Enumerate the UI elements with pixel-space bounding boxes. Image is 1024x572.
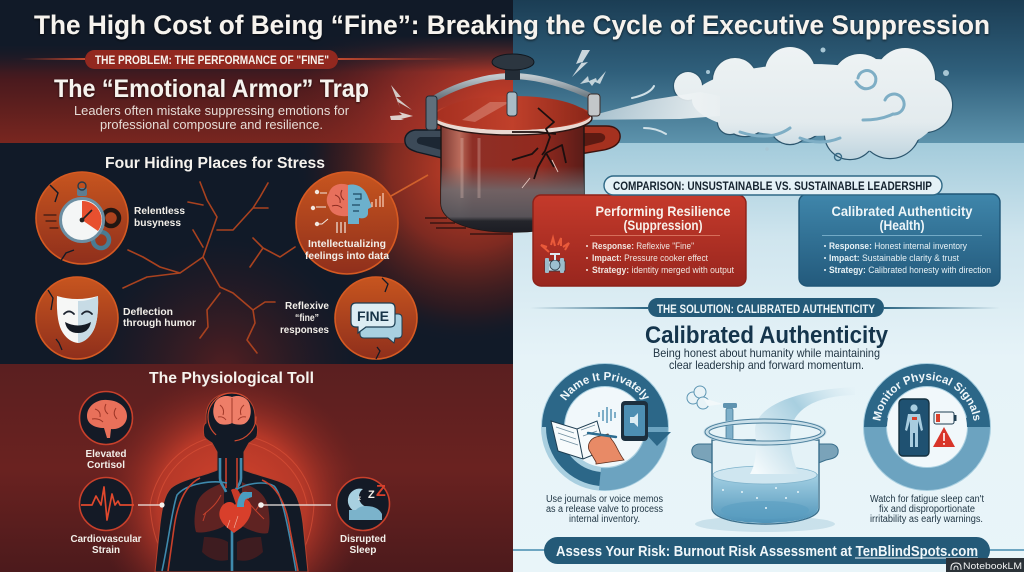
label: intellectualizing feelings into data [305, 239, 389, 262]
card: performing resilience: (Suppression) [624, 217, 702, 233]
step caption: monitor physical signals [870, 494, 984, 525]
icon: leaking valve [541, 238, 569, 273]
icon: stopwatch and gears [44, 182, 119, 248]
icon: moon, bed and zzz: Z [368, 489, 375, 501]
step caption: monitor physical signals: Watch for fatigue sleep can't [870, 494, 984, 505]
card: calibrated authenticity: Calibrated Authenticity [832, 203, 973, 219]
label: reflexive fine responses: Reflexive [285, 301, 329, 312]
item: intellectualizing feelings into data [296, 172, 398, 274]
step: monitor physical signals: Monitor Physical Signals [872, 372, 980, 421]
connector to pressure cooker [391, 175, 428, 196]
icon: pressure sparks [390, 50, 606, 120]
heading: four hiding places: Four Hiding Places for Stress [105, 155, 325, 172]
solution description [653, 346, 880, 372]
label: disrupted sleep [340, 534, 386, 556]
problem description: Leaders often mistake suppressing emotions for [74, 103, 350, 118]
badge: comparison [604, 176, 942, 195]
item: elevated cortisol [80, 392, 132, 471]
step caption: monitor physical signals: fix and disproportionate [879, 504, 975, 515]
card: performing resilience [533, 195, 746, 286]
step caption: name it privately [546, 494, 663, 525]
icon: brain [87, 400, 127, 438]
step caption: name it privately: Use journals or voice memos [546, 494, 663, 505]
solution description: Being honest about humanity while maintaining [653, 346, 880, 360]
item: deflection through humor [36, 277, 196, 359]
step: name it privately: Name It Privately [560, 372, 650, 400]
body silhouette with organs [150, 393, 314, 572]
label: elevated cortisol: Cortisol [87, 460, 125, 471]
comparison bullets: health [824, 241, 991, 275]
card: calibrated authenticity: (Health) [880, 217, 924, 233]
notebooklm watermark [946, 558, 1024, 572]
icon: journal, hand and phone [551, 401, 648, 464]
icon: brain and data head [311, 184, 383, 233]
step: name it privately [541, 363, 671, 525]
label: cardiovascular strain: Cardiovascular [70, 534, 142, 545]
icon: body scan, battery and warning [899, 399, 956, 456]
card: performing resilience: Performing Resilience [596, 203, 731, 219]
steam cloud [575, 47, 952, 160]
label: deflection through humor: Deflection [123, 307, 173, 318]
label: intellectualizing feelings into data: feelings into data [305, 251, 389, 262]
label: relentless busyness: busyness [134, 218, 181, 229]
label: relentless busyness [134, 206, 185, 229]
icon: fine speech bubbles: FINE [357, 309, 389, 324]
label: reflexive fine responses: responses [280, 325, 329, 336]
label: cardiovascular strain: Strain [92, 545, 120, 556]
comparison bullets: suppression: Response: Reflexive "Fine" [592, 241, 694, 251]
step: monitor physical signals [863, 363, 991, 525]
step caption: monitor physical signals: irritability as early warnings. [870, 514, 983, 525]
label: deflection through humor [123, 307, 196, 329]
heading: emotional armor trap: The “Emotional Armor” Trap [54, 75, 369, 103]
panel: the problem [20, 50, 463, 132]
item: disrupted sleep [336, 478, 390, 556]
pot cracks [512, 108, 566, 179]
panel: comparison [533, 176, 1000, 286]
comparison bullets: health: Impact: Sustainable clarity & trust [829, 253, 959, 263]
icon: moon, bed and zzz: z [358, 496, 361, 502]
badge: the solution: THE SOLUTION: CALIBRATED AUTHENTICITY [657, 302, 875, 316]
item: cardiovascular strain [70, 478, 142, 556]
badge: comparison: COMPARISON: UNSUSTAINABLE VS. SUSTAINABLE LEADERSHIP [613, 181, 932, 193]
label: disrupted sleep: Disrupted [340, 534, 386, 545]
item: reflexive fine responses [280, 277, 417, 359]
label: reflexive fine responses: “fine” [295, 313, 319, 324]
panel: the physiological toll [70, 370, 390, 572]
item: relentless busyness [36, 172, 185, 264]
label: cardiovascular strain [70, 534, 142, 556]
icon: calibrated glass pot [687, 386, 855, 532]
label: intellectualizing feelings into data: Intellectualizing [308, 239, 386, 250]
comparison bullets: suppression [586, 241, 734, 275]
badge: the problem: THE PROBLEM: THE PERFORMANCE OF "FINE" [95, 53, 329, 67]
label: elevated cortisol: Elevated [86, 449, 126, 460]
solution description: clear leadership and forward momentum. [669, 358, 864, 372]
connector: sleep [258, 502, 331, 508]
heading: calibrated authenticity: Calibrated Authenticity [645, 322, 889, 349]
comparison bullets: health: Response: Honest internal inventory [829, 241, 967, 251]
badge: the solution [648, 298, 884, 317]
comparison bullets: suppression: Impact: Pressure cooker effect [592, 253, 708, 263]
title: The High Cost of Being “Fine”: Breaking the Cycle of Executive Suppression [34, 10, 990, 40]
problem description: professional composure and resilience. [100, 117, 323, 132]
card: calibrated authenticity [799, 194, 1000, 286]
call to action banner: Assess Your Risk: Burnout Risk Assessment at TenBlindSpots.com [556, 543, 978, 560]
central cracks [123, 182, 295, 353]
notebooklm watermark: NotebookLM [963, 561, 1022, 572]
label: deflection through humor: through humor [123, 318, 196, 329]
problem description [74, 103, 350, 132]
label: disrupted sleep: Sleep [350, 545, 376, 556]
icon: moon, bed and zzz: Z [376, 483, 386, 500]
icon: pressure cooker [405, 54, 620, 234]
step caption: name it privately: internal inventory. [569, 514, 640, 525]
label: reflexive fine responses [280, 301, 329, 336]
badge: the problem [85, 50, 338, 69]
step caption: name it privately: as a release valve to process [546, 504, 663, 515]
icon: comedy mask [57, 296, 98, 343]
panel: four hiding places for stress [36, 155, 428, 359]
connector: cardiovascular [138, 502, 165, 508]
icon: heartbeat line [81, 487, 134, 520]
comparison bullets: suppression: Strategy: identity merged with output [592, 265, 734, 275]
panel: the solution [536, 298, 994, 532]
label: relentless busyness: Relentless [134, 206, 185, 217]
comparison bullets: health: Strategy: Calibrated honesty with direction [829, 265, 991, 275]
heading: physiological toll: The Physiological Toll [149, 370, 314, 387]
icon: moon, bed and zzz [348, 483, 386, 520]
label: elevated cortisol [86, 449, 126, 471]
call to action banner [513, 537, 1024, 564]
